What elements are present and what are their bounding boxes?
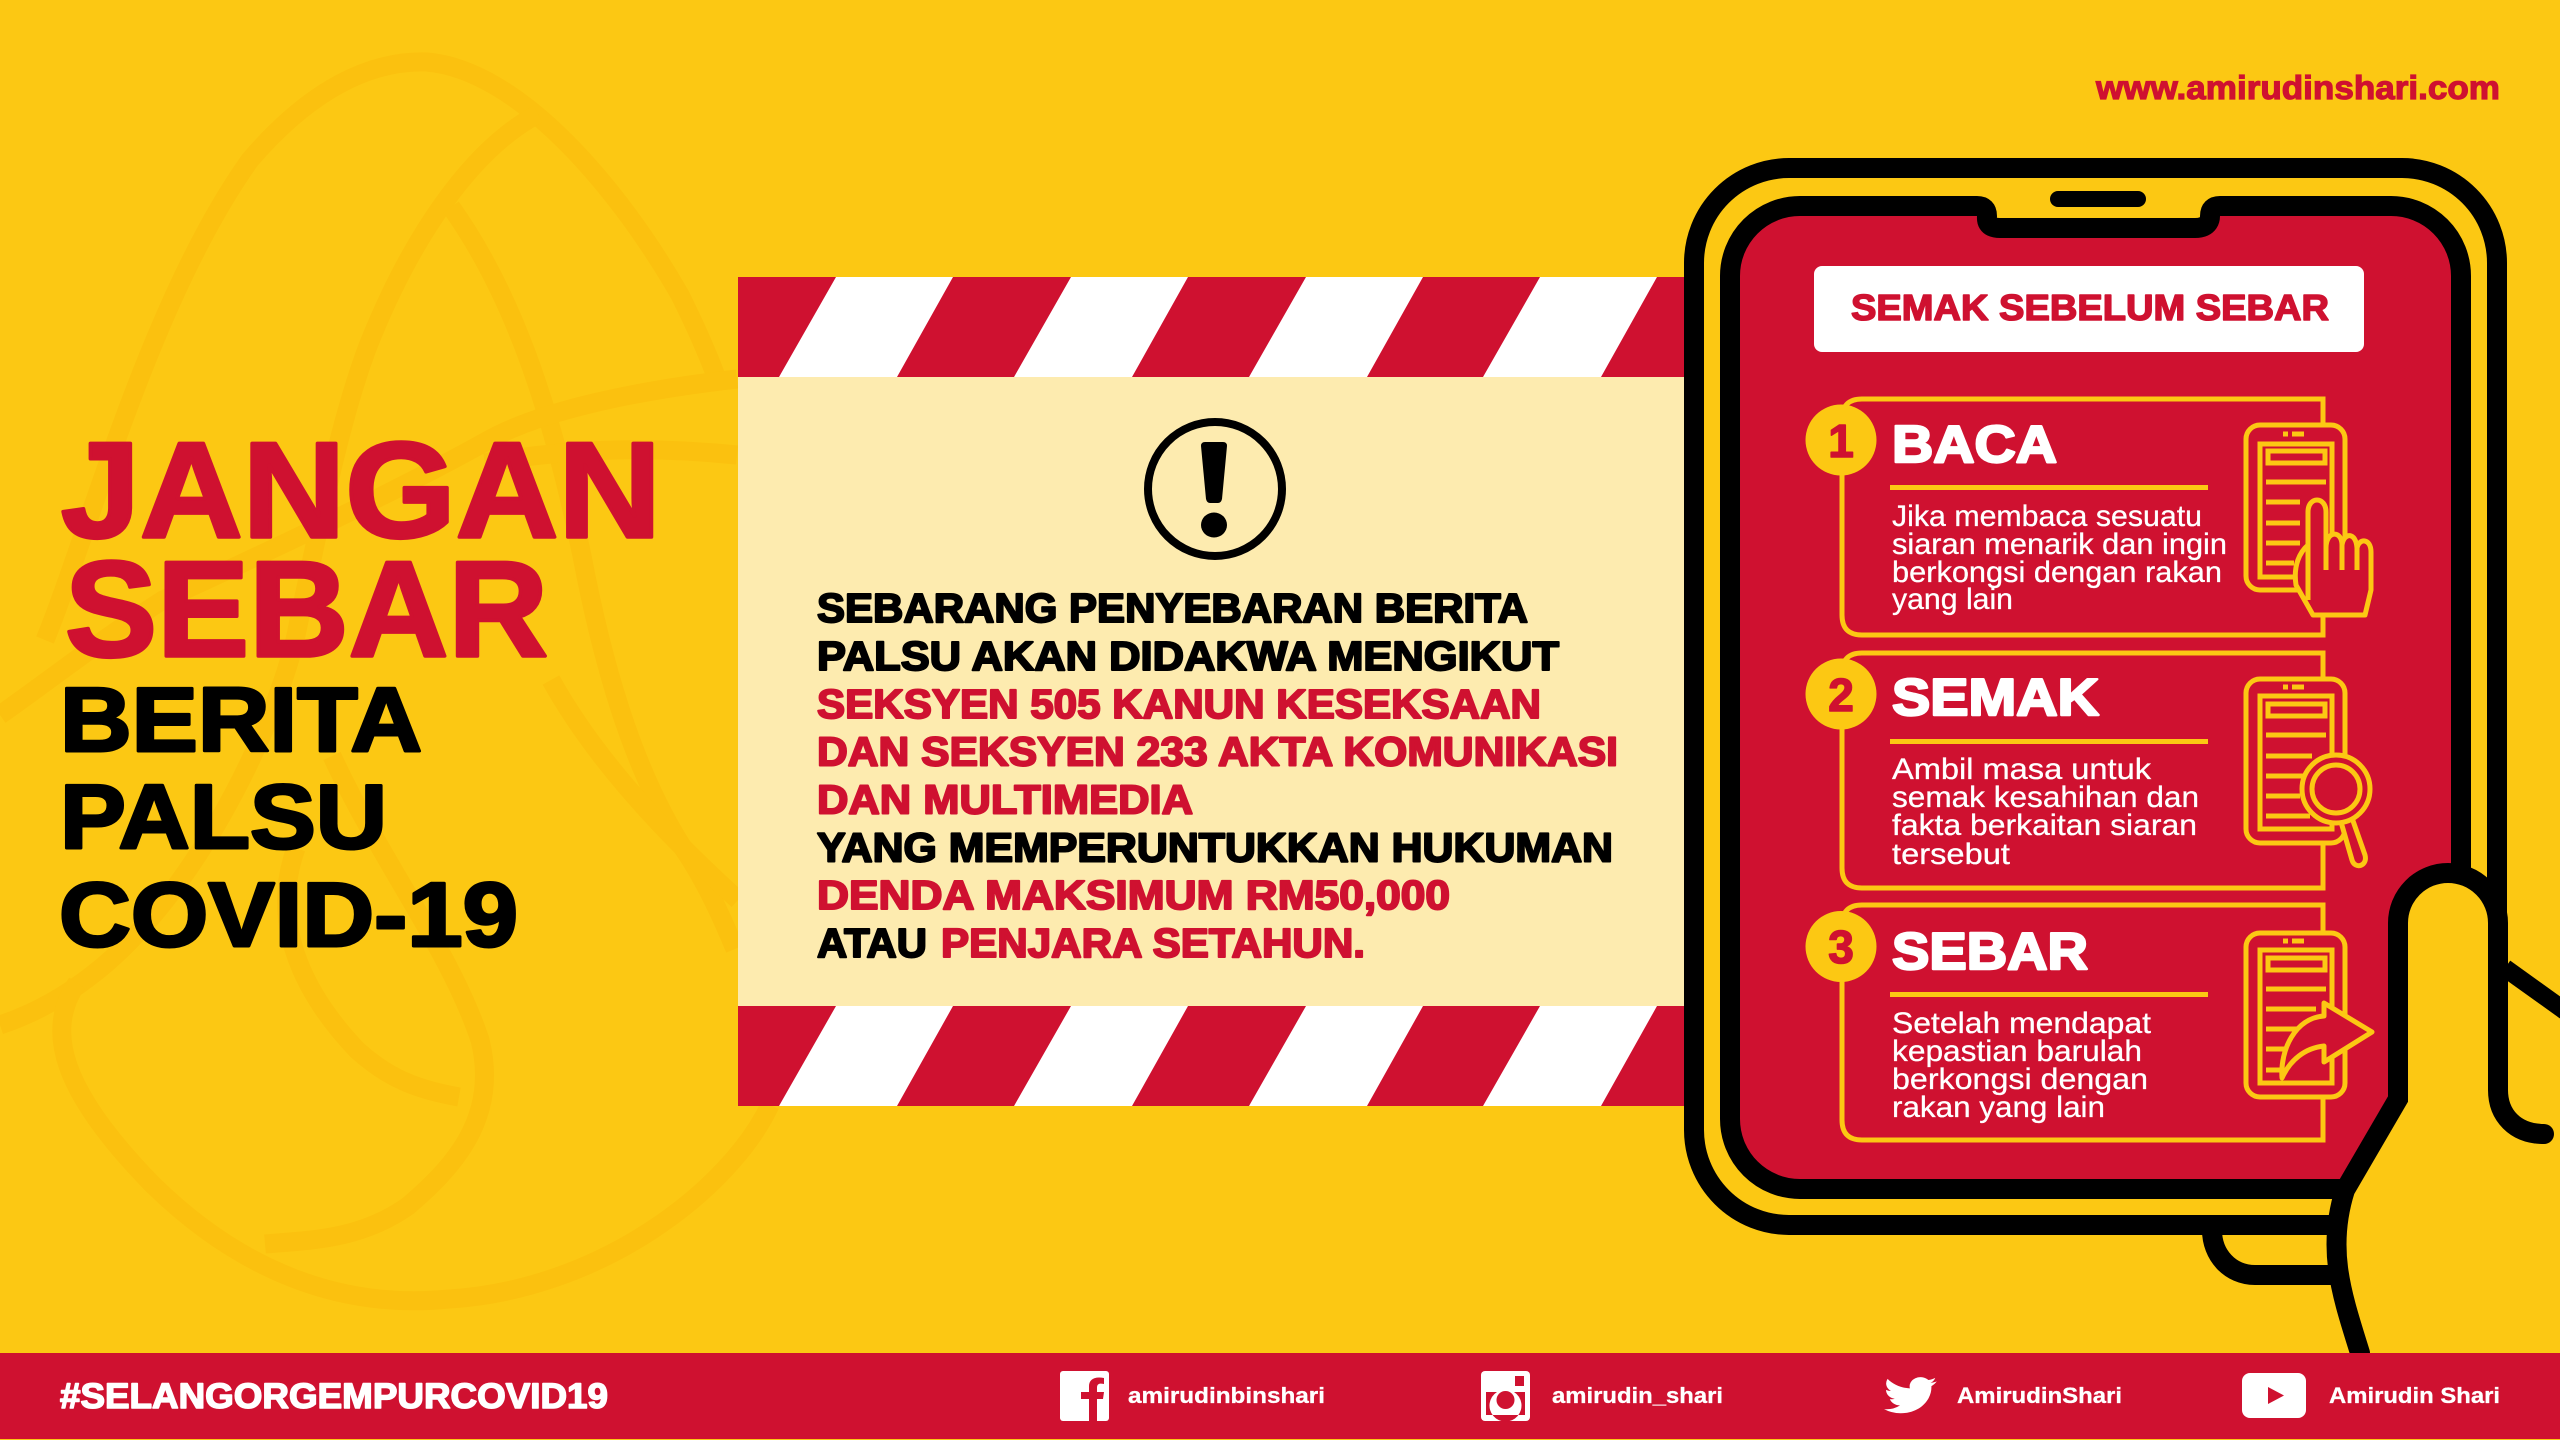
card 3: sebar: 3 <box>1828 921 1854 973</box>
card 3 description <box>1892 1007 2152 1124</box>
warning text: DAN MULTIMEDIA <box>817 776 1193 822</box>
card 2: semak: SEMAK <box>1892 669 2099 727</box>
background watermark pattern <box>0 62 770 1301</box>
facebook: amirudinbinshari <box>1128 1383 1325 1408</box>
card 1 description: yang lain <box>1892 583 2013 616</box>
warning text: PENJARA SETAHUN. <box>941 920 1365 966</box>
card 1: baca: BACA <box>1892 416 2057 474</box>
title: Jangan Sebar Berita Palsu COVID-19: BERITA <box>60 670 422 771</box>
title: Jangan Sebar Berita Palsu COVID-19: JANGAN <box>61 414 661 566</box>
card 2 description: tersebut <box>1892 838 2011 871</box>
title: Jangan Sebar Berita Palsu COVID-19 <box>59 414 661 966</box>
twitter <box>1884 1377 2122 1413</box>
card 3 description: kepastian barulah <box>1892 1035 2142 1068</box>
warning text: YANG MEMPERUNTUKKAN HUKUMAN <box>817 824 1613 870</box>
card 3: sebar: SEBAR <box>1892 923 2088 981</box>
youtube <box>2242 1373 2500 1418</box>
icon: phone with magnifier <box>2246 679 2370 866</box>
icon: phone with tapping hand <box>2246 425 2371 615</box>
warning text: DENDA MAKSIMUM RM50,000 <box>817 872 1450 918</box>
card 1 description: berkongsi dengan rakan <box>1892 556 2222 589</box>
heading box: semak sebelum sebar: SEMAK SEBELUM SEBAR <box>1851 287 2329 328</box>
card 1 description: Jika membaca sesuatu <box>1892 500 2202 533</box>
card 1 description: siaran menarik dan ingin <box>1892 528 2227 561</box>
phone body <box>1694 168 2497 1225</box>
lower finger behind phone <box>2212 1230 2340 1275</box>
title: Jangan Sebar Berita Palsu COVID-19: SEBAR <box>65 533 548 685</box>
phone <box>1694 168 2497 1275</box>
card 2 description <box>1892 753 2199 871</box>
card 1: baca: 1 <box>1828 415 1854 467</box>
hazard stripes bottom <box>738 1006 1688 1106</box>
twitter: AmirudinShari <box>1957 1383 2122 1408</box>
card 1 description <box>1892 500 2227 616</box>
instagram <box>1481 1371 1723 1422</box>
website url: www.amirudinshari.com <box>2095 69 2500 106</box>
card 3 description: Setelah mendapat <box>1892 1007 2152 1040</box>
warning text: SEKSYEN 505 KANUN KESEKSAAN <box>817 681 1541 727</box>
phone screen <box>1730 206 2461 1189</box>
panel: warning notice <box>738 277 1688 1106</box>
card 3 description: rakan yang lain <box>1892 1091 2105 1124</box>
facebook <box>1060 1371 1325 1421</box>
title: Jangan Sebar Berita Palsu COVID-19: COVID-19 <box>59 865 518 966</box>
hashtag: #SELANGORGEMPURCOVID19 <box>60 1377 608 1416</box>
card 2: semak <box>1806 653 2370 888</box>
card 2: semak: 2 <box>1828 669 1854 721</box>
warning text: SEBARANG PENYEBARAN BERITA <box>817 585 1528 631</box>
warning text <box>817 585 1618 966</box>
title: Jangan Sebar Berita Palsu COVID-19: PALSU <box>60 767 387 868</box>
card 2 description: semak kesahihan dan <box>1892 781 2199 814</box>
hazard stripes top <box>738 277 1688 377</box>
card 2 description: fakta berkaitan siaran <box>1892 809 2197 842</box>
icon: exclamation mark <box>1148 422 1282 556</box>
instagram: amirudin_shari <box>1552 1383 1723 1408</box>
warning text: PALSU AKAN DIDAKWA MENGIKUT <box>817 633 1559 679</box>
warning text: ATAU <box>817 920 927 966</box>
card 1: baca <box>1806 399 2371 635</box>
heading box: semak sebelum sebar <box>1814 266 2364 352</box>
card 3 description: berkongsi dengan <box>1892 1063 2148 1096</box>
footer bar <box>0 1353 2560 1439</box>
warning text: DAN SEKSYEN 233 AKTA KOMUNIKASI <box>817 728 1618 774</box>
hand holding phone <box>2336 873 2560 1353</box>
card 2 description: Ambil masa untuk <box>1892 753 2152 786</box>
icon: phone with share arrow <box>2246 933 2372 1097</box>
youtube: Amirudin Shari <box>2329 1383 2500 1408</box>
phone speaker <box>2050 191 2146 207</box>
card 3: sebar <box>1806 905 2372 1140</box>
